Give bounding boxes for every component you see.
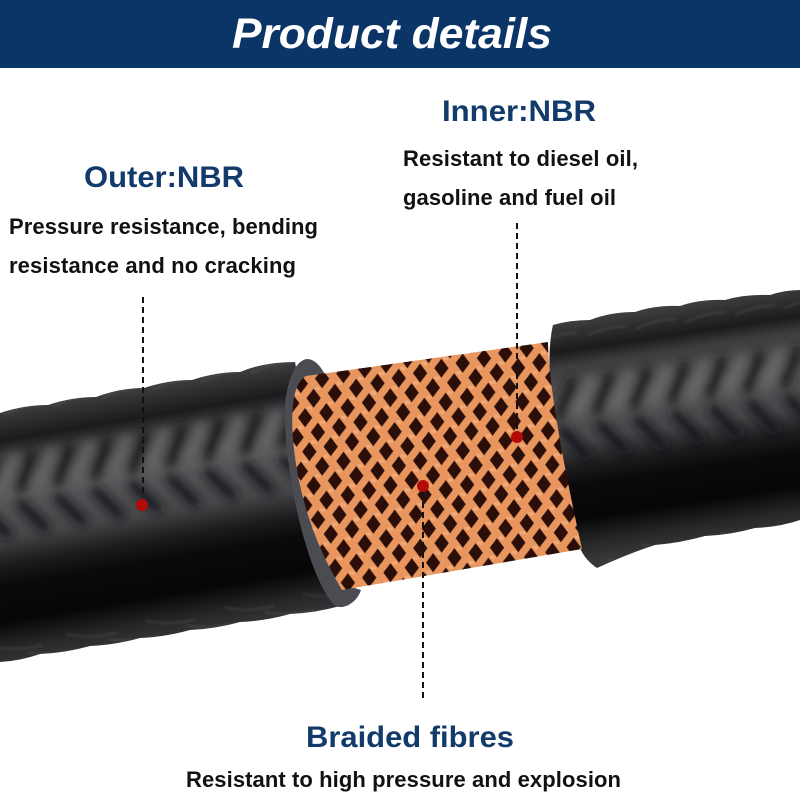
- inner description: gasoline and fuel oil: [403, 185, 616, 210]
- callout: braided fibres: [186, 721, 621, 792]
- braided description: Resistant to high pressure and explosion: [186, 767, 621, 792]
- callout: inner NBR: [403, 95, 638, 210]
- hose cut rim: [285, 359, 361, 607]
- outer description: [9, 214, 318, 278]
- header banner: [0, 0, 800, 68]
- title: Product details: [232, 10, 552, 58]
- outer heading: Outer:NBR: [84, 161, 244, 194]
- inner description: Resistant to diesel oil,: [403, 146, 638, 171]
- callout: outer NBR: [9, 161, 318, 278]
- left hose section: [0, 362, 338, 662]
- braided heading: Braided fibres: [306, 721, 514, 754]
- right hose section: [549, 290, 800, 568]
- outer description: Pressure resistance, bending: [9, 214, 318, 239]
- braided fibre layer: [285, 335, 585, 595]
- leader line: braided: [417, 480, 429, 702]
- inner heading: Inner:NBR: [442, 95, 596, 128]
- outer description: resistance and no cracking: [9, 253, 296, 278]
- inner description: [403, 146, 638, 210]
- leader line: inner: [511, 223, 523, 443]
- leader line: outer: [136, 297, 148, 511]
